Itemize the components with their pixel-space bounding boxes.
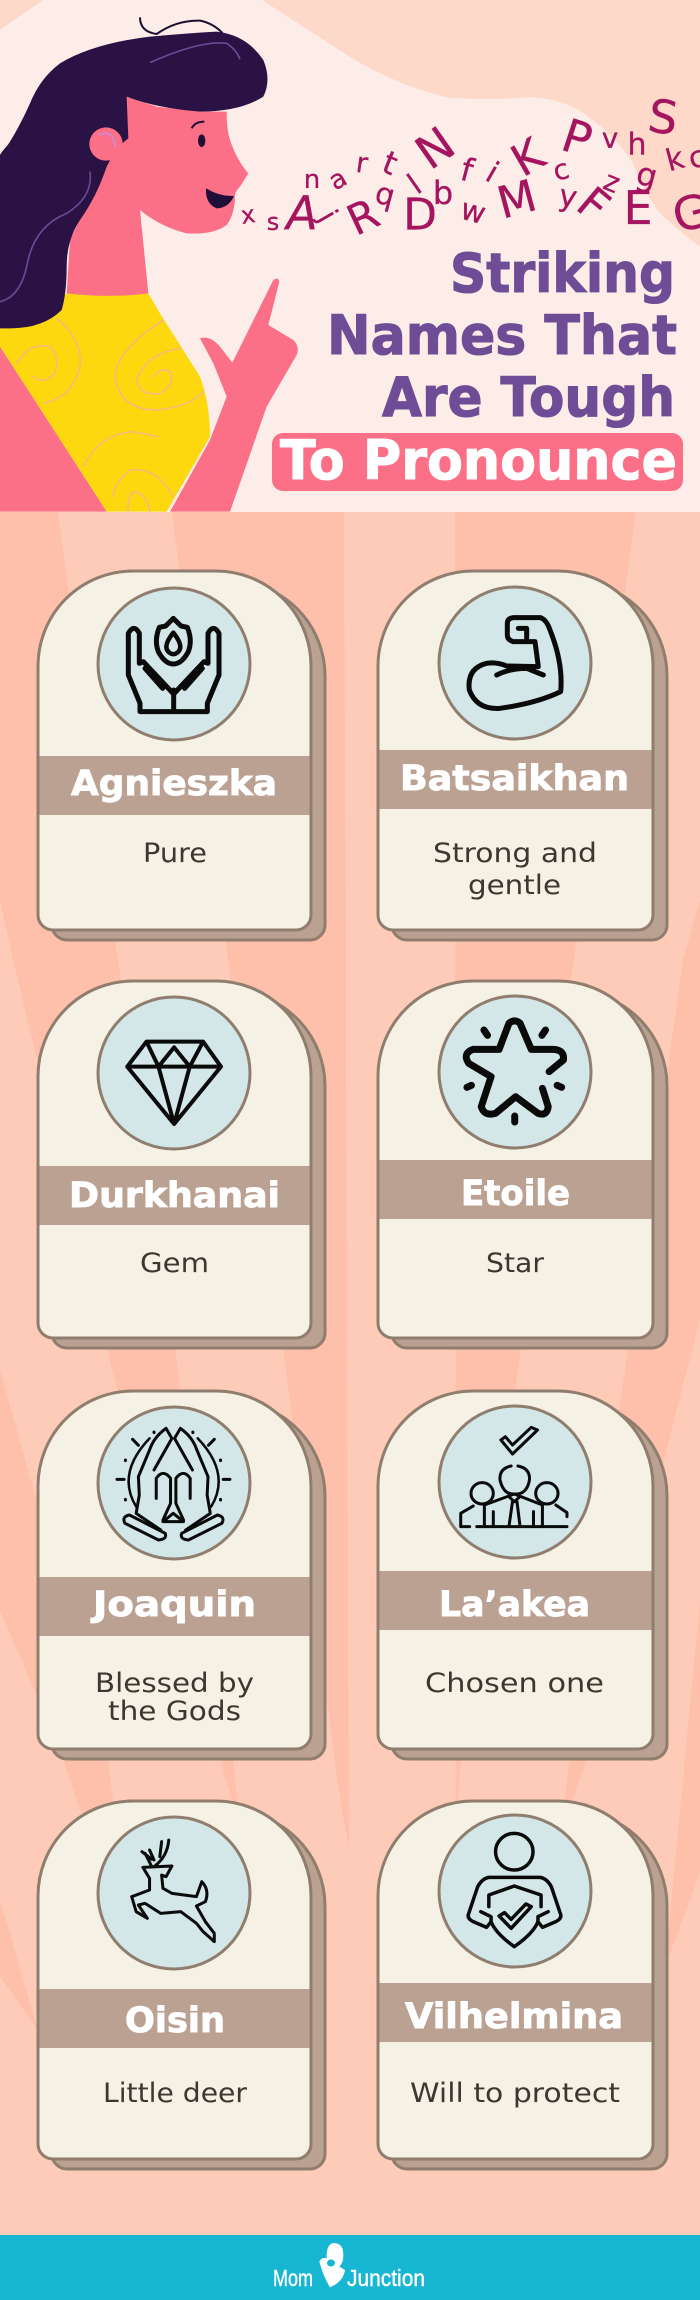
scattered letters: v <box>602 122 618 154</box>
panel: Joaquin: the Gods <box>108 1696 241 1727</box>
scattered letters: M <box>492 170 542 230</box>
scattered letters: g <box>632 154 662 196</box>
scattered letters: n <box>304 165 320 195</box>
panel: La'akea: La’akea <box>439 1585 590 1625</box>
scattered letters: F <box>567 177 619 233</box>
scattered letters: f <box>457 150 478 190</box>
panel: Oisin: Oisin <box>125 2001 225 2041</box>
scattered letters: S <box>645 88 681 146</box>
hair strands <box>0 43 240 302</box>
eye <box>198 134 205 147</box>
panel: Batsaikhan: gentle <box>468 870 561 901</box>
panel: Etoile: Etoile <box>461 1174 570 1214</box>
icon: leaping deer <box>132 1840 214 1942</box>
scattered letters: i <box>480 156 504 190</box>
title: Are Tough <box>382 366 675 429</box>
header panel <box>0 0 700 512</box>
scattered letters: D <box>403 190 437 240</box>
ear inner <box>98 133 115 147</box>
panel: Batsaikhan: Batsaikhan <box>400 759 629 799</box>
logo: MomJunction: Mom <box>273 2265 313 2291</box>
icon: chosen person in group <box>461 1427 567 1527</box>
scattered letters: R <box>339 189 387 245</box>
illustration: woman speaking <box>0 17 298 512</box>
panel: Joaquin: Joaquin <box>91 1585 256 1625</box>
scattered letters: P <box>555 108 599 168</box>
panel: Vilhelmina: Vilhelmina <box>405 1997 623 2037</box>
scattered letters: r <box>354 146 370 180</box>
panel: Etoile: Star <box>486 1248 545 1279</box>
scattered letters: s <box>267 208 279 236</box>
shirt <box>0 293 210 512</box>
logo: MomJunction <box>273 2243 425 2291</box>
icon: flexed arm <box>469 618 561 708</box>
scattered letters: t <box>377 143 403 183</box>
scattered letters: b <box>433 174 453 212</box>
scattered letters: w <box>457 192 489 232</box>
icon: hands with flower <box>128 618 219 712</box>
panel: Batsaikhan: Strong and <box>433 838 597 869</box>
icon: star <box>466 1021 564 1122</box>
hand with raised finger <box>170 279 298 512</box>
scattered letters: E <box>623 181 653 235</box>
panel: Agnieszka <box>38 571 325 940</box>
face and neck <box>67 97 248 296</box>
scattered letters: a <box>324 163 352 197</box>
panel: Etoile <box>378 981 667 1348</box>
scattered letters: c <box>549 152 573 188</box>
panel: Vilhelmina <box>378 1801 667 2169</box>
ear <box>89 127 123 161</box>
panel: Agnieszka: Agnieszka <box>71 764 277 804</box>
eyebrow <box>192 122 204 128</box>
scattered letters: y <box>556 178 580 216</box>
panel: La'akea: Chosen one <box>425 1668 604 1699</box>
panel: Joaquin: Blessed by <box>95 1668 254 1699</box>
scattered letters <box>239 88 700 245</box>
scattered letters: h <box>627 128 647 162</box>
icon: praying hands <box>117 1428 230 1540</box>
panel: La'akea <box>378 1391 667 1759</box>
title: Striking <box>450 242 675 305</box>
shirt swirls <box>17 318 203 512</box>
mouth <box>206 188 234 208</box>
panel: Oisin: Little deer <box>103 2078 248 2109</box>
hair <box>0 32 267 328</box>
title: Names That <box>327 304 677 367</box>
logo: MomJunction: Junction <box>347 2265 425 2291</box>
scattered letters: x <box>239 200 257 230</box>
panel: Oisin <box>38 1801 325 2169</box>
flyaway hair <box>0 17 223 157</box>
panel: Agnieszka: Pure <box>143 838 207 869</box>
panel: Durkhanai <box>38 981 325 1348</box>
panel: Vilhelmina: Will to protect <box>410 2078 620 2109</box>
title: To Pronounce <box>280 429 677 492</box>
background with rays <box>0 512 700 2242</box>
panel: Durkhanai: Gem <box>140 1248 209 1279</box>
icon: person with shield <box>468 1833 561 1947</box>
panel: Joaquin <box>38 1391 325 1759</box>
panel: Durkhanai: Durkhanai <box>69 1176 280 1216</box>
scattered letters: l <box>402 168 428 202</box>
scattered letters: A <box>283 186 318 240</box>
panel: Batsaikhan <box>378 571 667 940</box>
scattered letters: q <box>371 176 399 214</box>
scattered letters: j <box>311 204 344 228</box>
arm <box>0 347 107 512</box>
title <box>272 242 683 492</box>
scattered letters: z <box>599 164 625 200</box>
scattered letters: k <box>662 141 689 179</box>
scattered letters: N <box>405 116 465 180</box>
scattered letters: K <box>503 128 554 187</box>
icon: diamond <box>127 1042 221 1124</box>
footer bar <box>0 2235 700 2300</box>
